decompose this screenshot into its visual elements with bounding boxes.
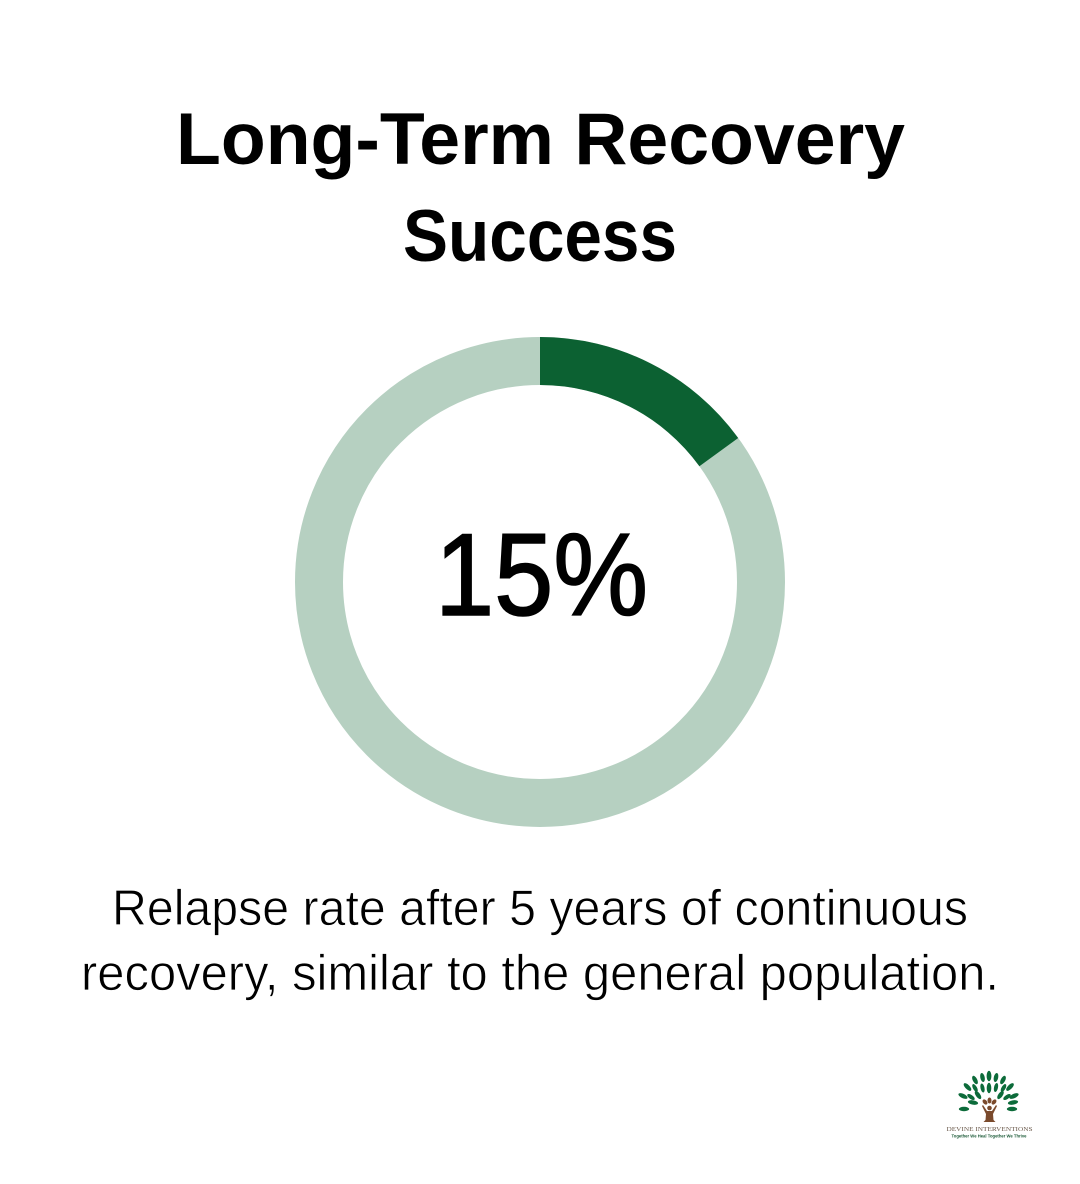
value: 15%: 15%: [435, 509, 648, 640]
description text: [81, 880, 999, 1001]
icon: tree: [958, 1071, 1019, 1122]
donut chart: 15%: [319, 337, 761, 803]
title: [176, 99, 905, 277]
title: Long-Term Recovery: [176, 99, 905, 180]
logo name: DEVINE INTERVENTIONS: [946, 1126, 1033, 1133]
description text: Relapse rate after 5 years of continuous: [112, 880, 968, 936]
ring segment: 15%: [540, 337, 738, 466]
logo: Devine Interventions: [946, 1071, 1033, 1138]
ring track: [319, 361, 761, 803]
description text: recovery, similar to the general population.: [81, 945, 999, 1001]
icon: trunk figure: [982, 1098, 997, 1122]
title: Success: [403, 196, 677, 277]
logo tagline: Together We Heal Together We Thrive: [952, 1134, 1027, 1138]
